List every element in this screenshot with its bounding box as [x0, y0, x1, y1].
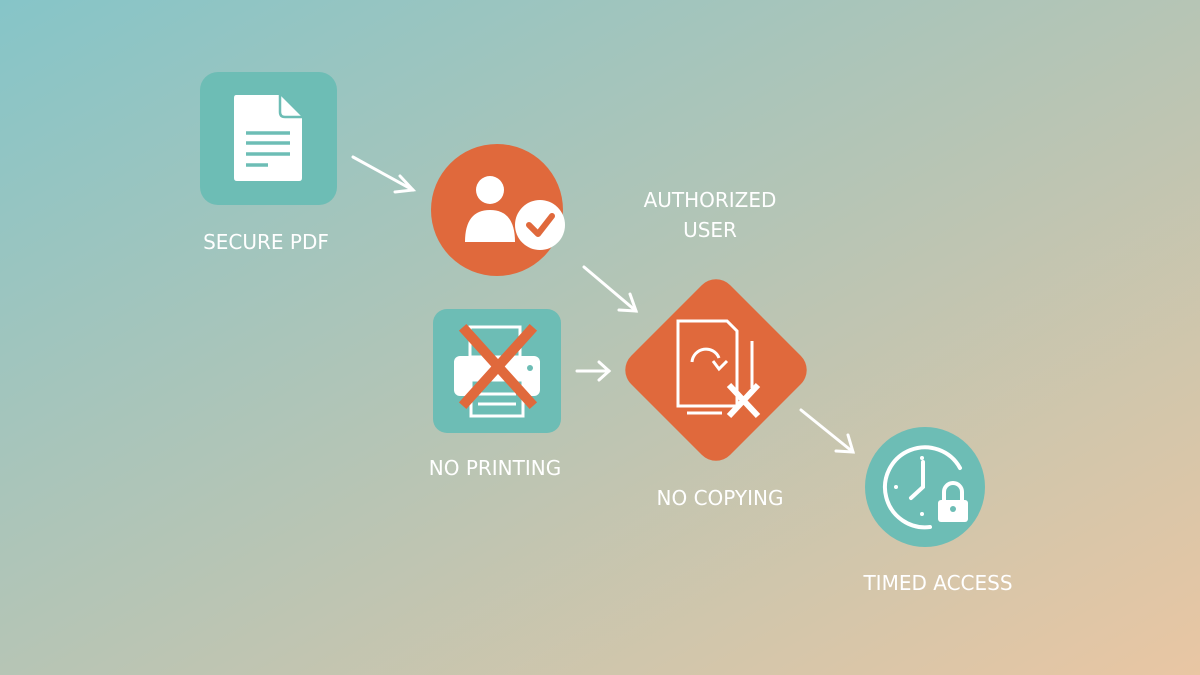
arrow: user to copying: [584, 267, 636, 311]
label: no copying: NO COPYING: [657, 486, 783, 510]
label: secure pdf: SECURE PDF: [203, 230, 329, 254]
label: timed access: TIMED ACCESS: [862, 571, 1013, 595]
arrow: pdf to user: [353, 157, 413, 192]
label: authorized user: [644, 188, 776, 242]
icon: authorized user circle: [431, 144, 565, 276]
icon: timed access clock: [865, 427, 985, 547]
arrow: printing to copying: [577, 362, 609, 380]
icon: no printing: [433, 309, 561, 433]
label: no printing: NO PRINTING: [429, 456, 561, 480]
icon: no copying diamond: [617, 271, 815, 469]
label: authorized user: AUTHORIZED: [644, 188, 776, 212]
icon: secure pdf document: [200, 72, 337, 205]
label: authorized user: USER: [683, 218, 737, 242]
arrow: copying to timed access: [801, 410, 853, 452]
